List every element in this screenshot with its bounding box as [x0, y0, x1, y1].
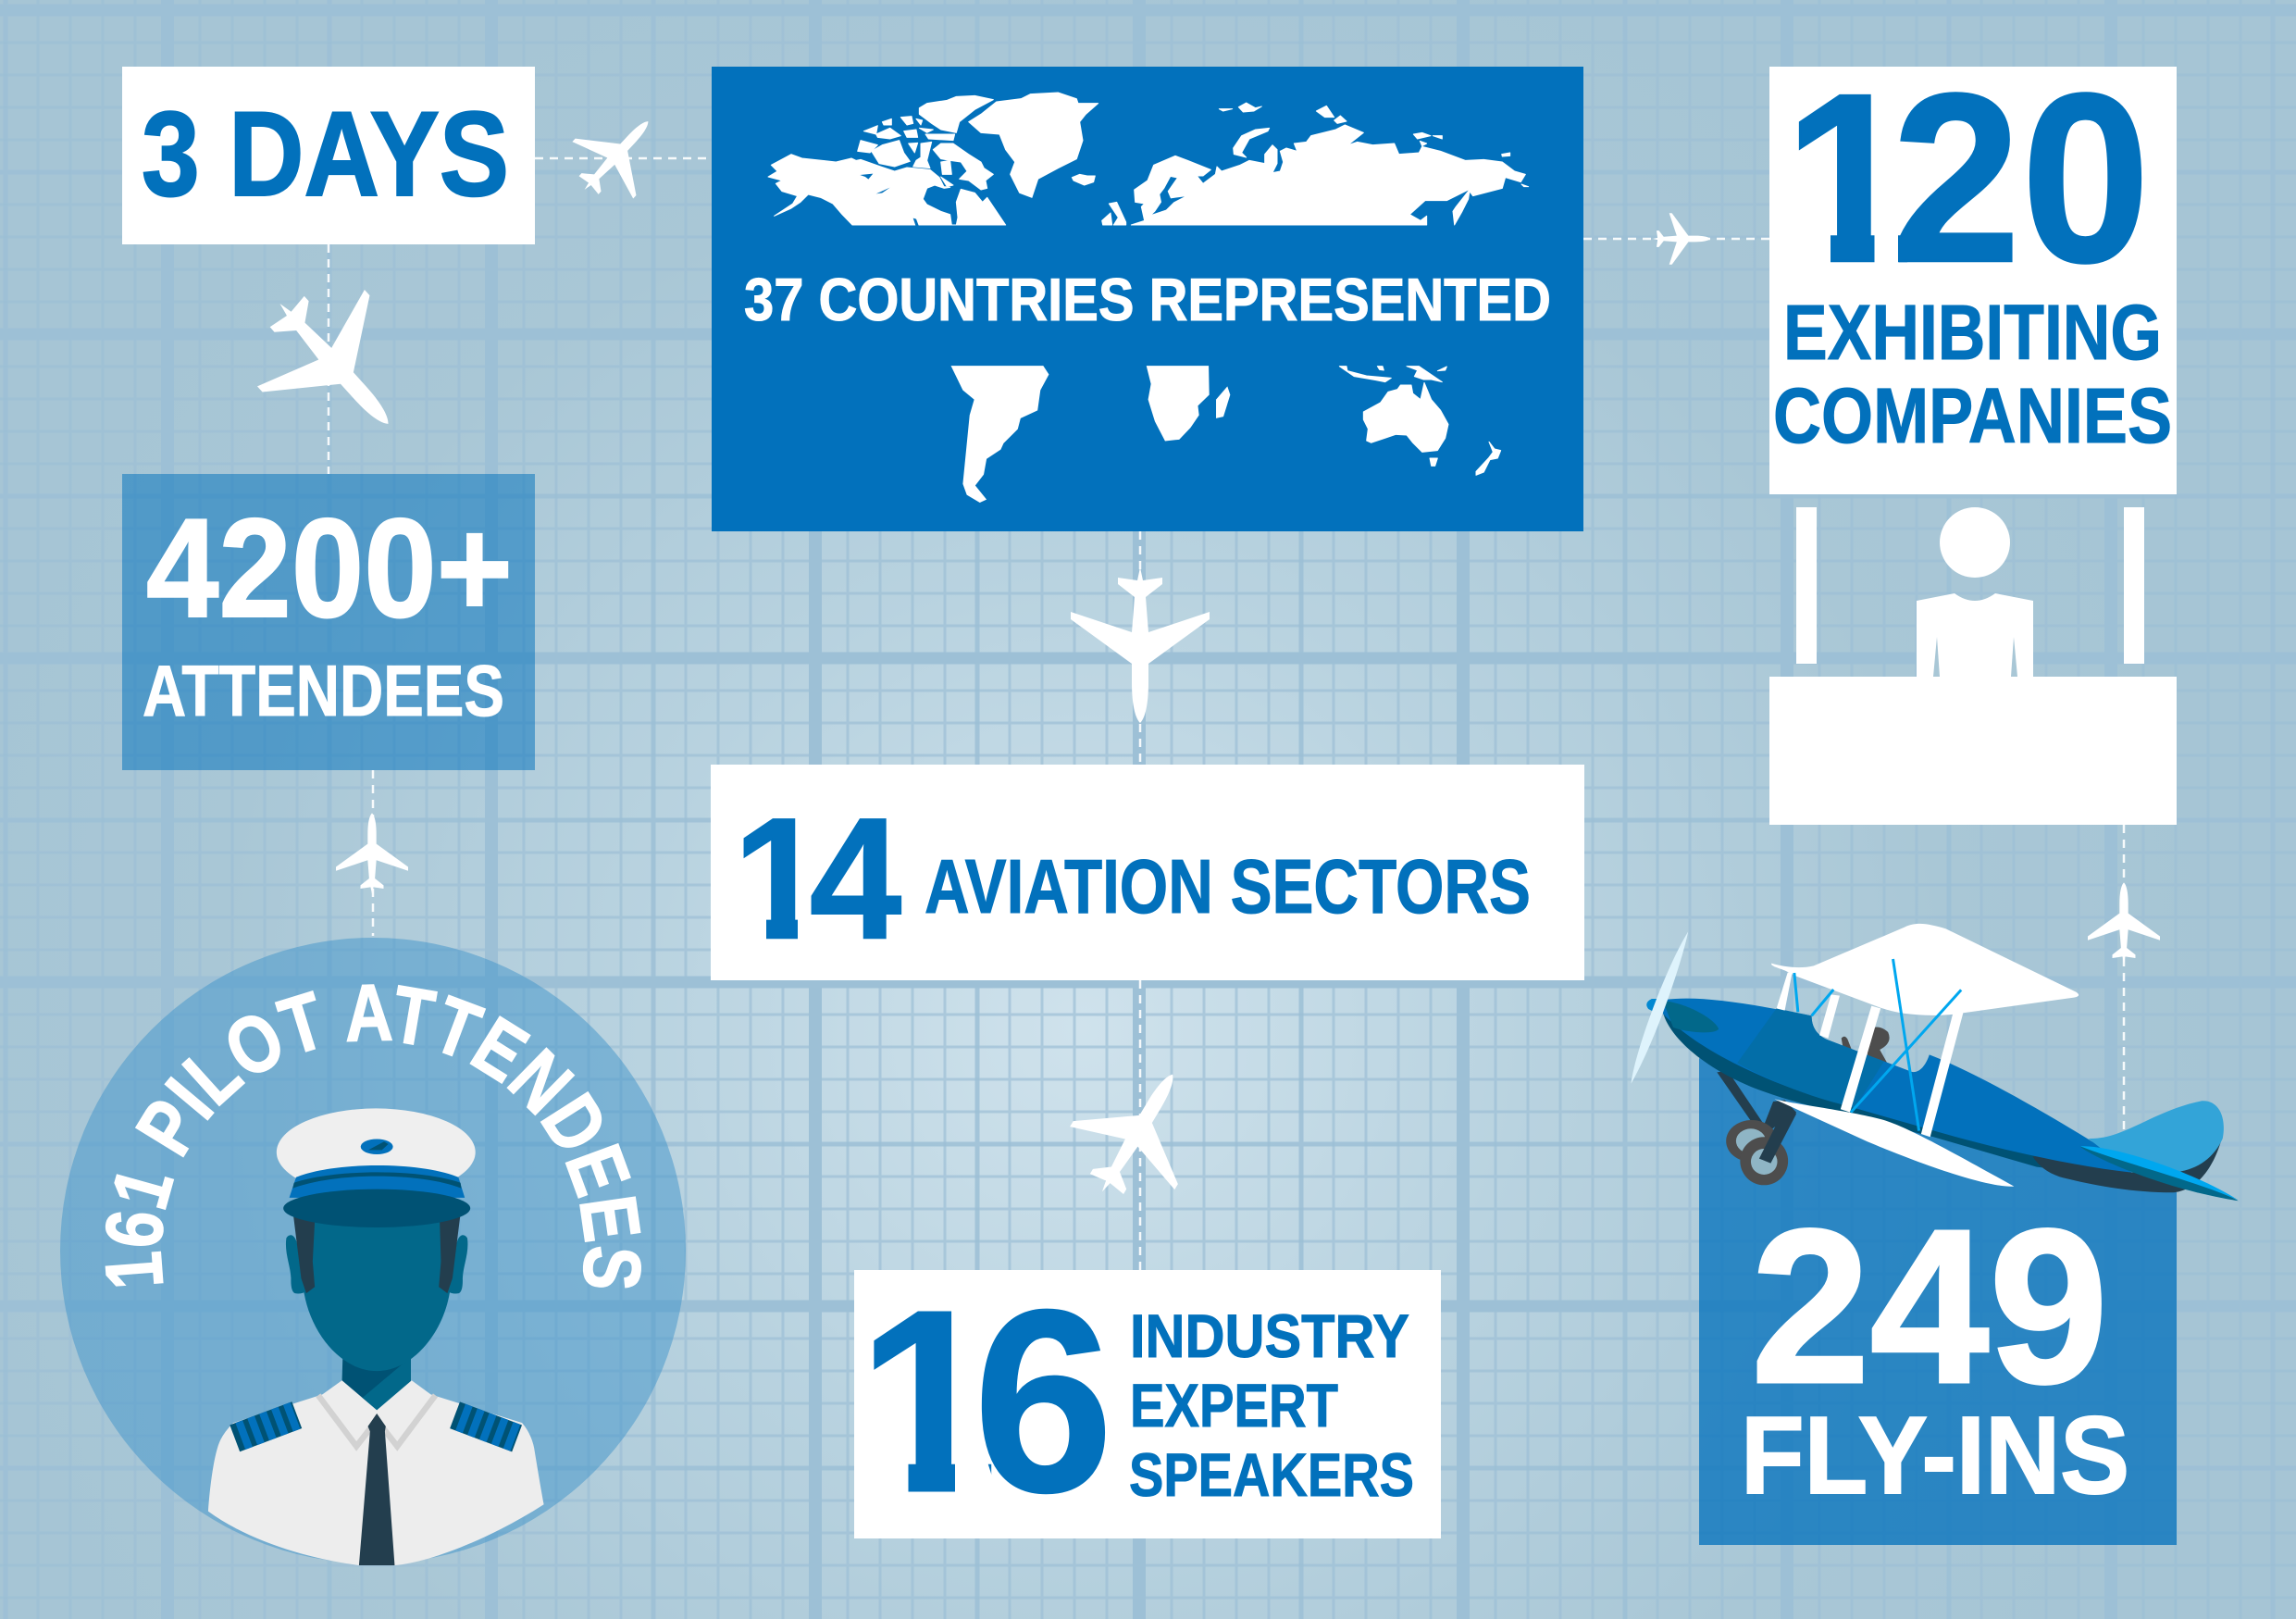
label: industry: INDUSTRY: [1130, 1301, 1409, 1370]
panel: 14 aviation sectors: [711, 765, 1584, 980]
number: 249: 249: [1751, 1184, 2108, 1429]
panel: 3 days: [122, 67, 535, 244]
number: 4200+: 4200+: [146, 490, 513, 647]
panel: pilot attendees: [60, 938, 686, 1565]
world map: Eurasia: [1102, 103, 1529, 225]
icon: plane between 3 days and attendees: [227, 255, 441, 472]
icon: plane between sectors and speakers: [1049, 1043, 1225, 1223]
icon: pilot: [208, 1108, 544, 1565]
label: attendees: ATTENDEES: [143, 650, 504, 731]
icon: exhibitor booth: [1769, 507, 2177, 825]
panel: 16 industry expert speakers: [854, 1255, 1441, 1547]
icon: plane between map and exhibitors: [1653, 213, 1710, 265]
icon: plane above pilot circle: [336, 813, 408, 894]
panel: world map, 37 countries: [712, 67, 1583, 531]
icon: plane between 3 days and map: [554, 93, 678, 218]
label: aviation sectors: AVIATION SECTORS: [925, 843, 1531, 929]
label: speakers: SPEAKERS: [1129, 1440, 1414, 1509]
icon: plane between map and sectors: [1071, 567, 1210, 723]
number: 16: 16: [857, 1255, 1113, 1547]
panel: 249 fly-ins: [1699, 1058, 2177, 1545]
number: 120: 120: [1784, 44, 2150, 313]
icon: plane above biplane: [2088, 882, 2160, 964]
label: exhibiting: EXHIBITING: [1783, 289, 2162, 376]
label: expert: EXPERT: [1130, 1371, 1338, 1439]
curved heading: 161 pilot attendees: 161 PILOT ATTENDEES: [105, 984, 641, 1289]
icon: biplane: [1631, 924, 2239, 1201]
label: companies: COMPANIES: [1773, 372, 2172, 459]
panel: 120 exhibiting companies: [1769, 44, 2177, 494]
number: 14: 14: [733, 781, 901, 975]
panel: attendees: [122, 474, 535, 770]
world map: Australasia: [1339, 367, 1501, 475]
world map: North America and Greenland: [768, 93, 1098, 226]
world map: South America and Africa: [951, 366, 1230, 503]
dashed flight routes: [329, 158, 2124, 1270]
label: fly-ins: FLY-INS: [1741, 1394, 2129, 1517]
heading: 3 days: 3 DAYS: [142, 86, 509, 221]
heading: 37 countries represented: 37 COUNTRIES REPRESENTED: [744, 266, 1551, 333]
